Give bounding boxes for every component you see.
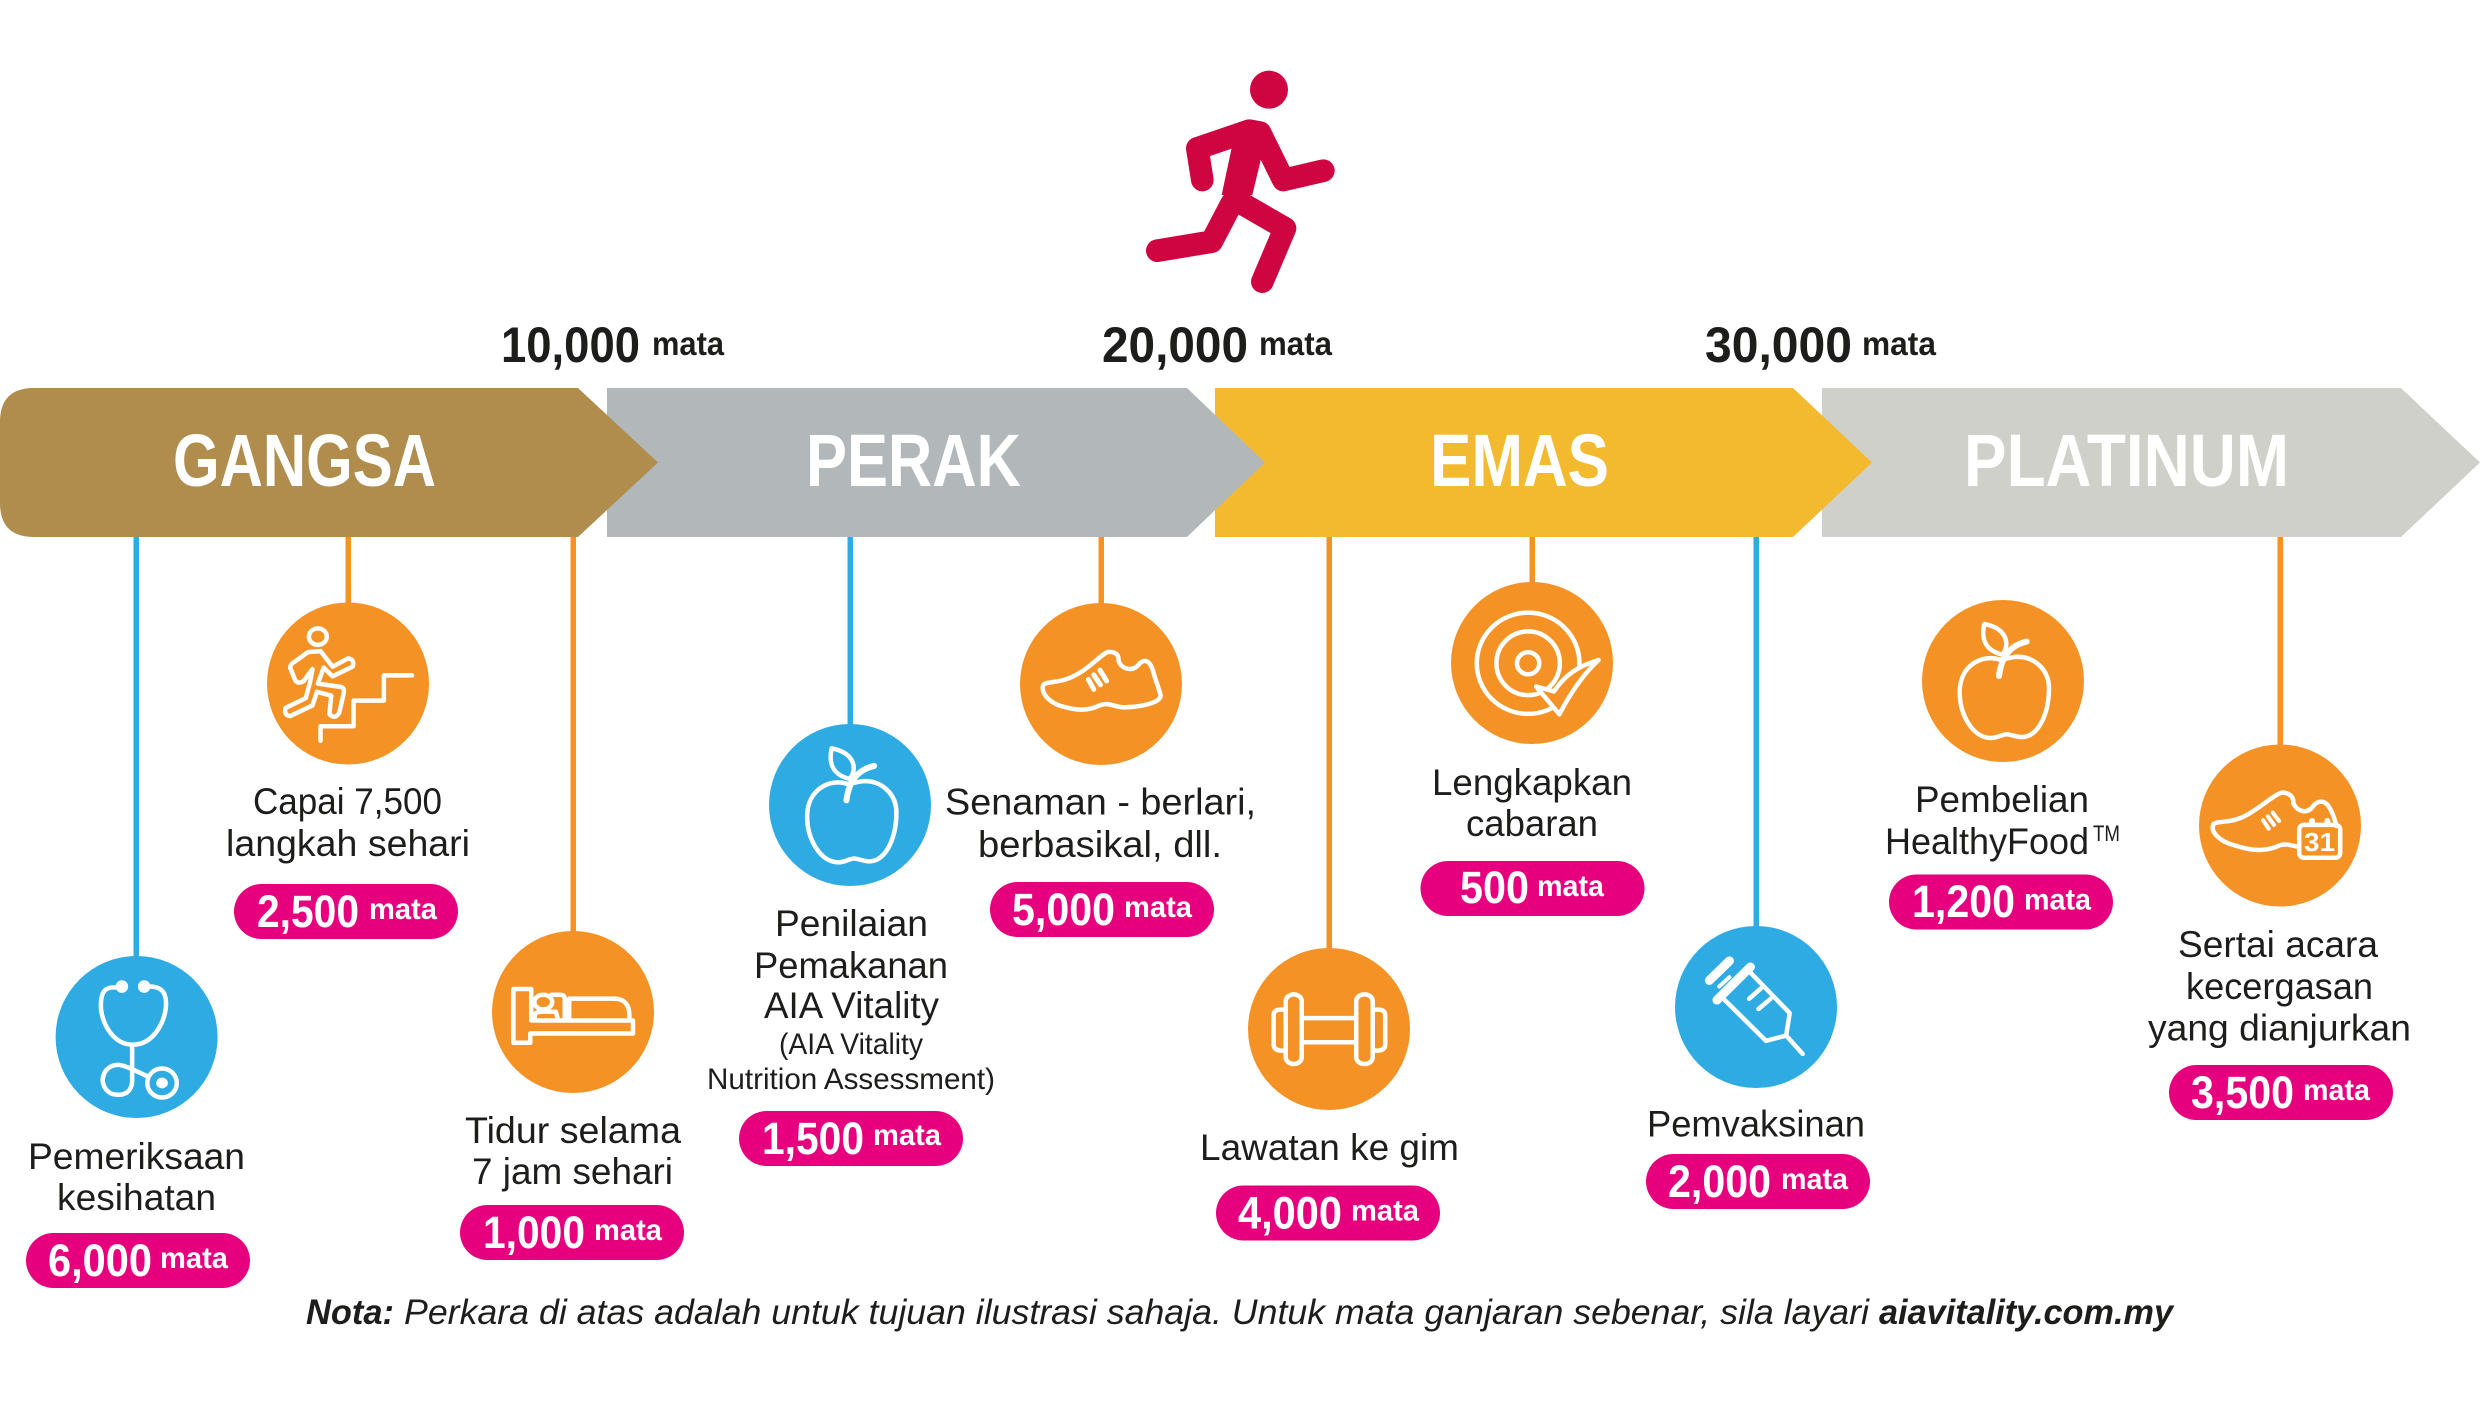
pill: 4,000 mata: [1216, 1186, 1440, 1240]
pill: 2,500 mata: [234, 884, 458, 939]
threshold: 30,000 mata: mata: [1862, 325, 1937, 362]
activity: Senaman - berlari, berbasikal, dll.: [945, 537, 1256, 937]
label: Lengkapkan cabaran: [1432, 761, 1632, 844]
pill: 1,000 mata: mata: [594, 1214, 662, 1247]
pill: 5,000 mata: [990, 882, 1214, 937]
pill: 2,500 mata: 2,500: [257, 886, 359, 937]
icon: dumbbell: [1274, 994, 1385, 1064]
label: Sertai acara kecergasan yang dianjurkan: Sertai acara: [2178, 923, 2378, 965]
label: Lengkapkan cabaran: Lengkapkan: [1432, 761, 1632, 803]
label: Penilaian Pemakanan AIA Vitality: Pemakanan: [754, 944, 948, 986]
label: Pembelian HealthyFood TM: HealthyFood: [1885, 820, 2089, 862]
label: Lawatan ke gim: Lawatan ke gim: [1200, 1126, 1459, 1168]
label: Capai 7,500 langkah sehari: Capai 7,500: [253, 780, 442, 822]
label: Pembelian HealthyFood TM: TM: [2093, 821, 2120, 846]
pill: 3,500 mata: 3,500: [2191, 1067, 2294, 1118]
activity: Sertai acara kecergasan yang dianjurkan: [2148, 537, 2411, 1120]
pill: 500 mata: mata: [1537, 870, 1604, 903]
tier arrow: EMAS: [1215, 388, 1872, 537]
activity: Lawatan ke gim: [1200, 537, 1459, 1240]
tier arrow: PERAK: [607, 388, 1265, 537]
pill: 5,000 mata: mata: [1124, 891, 1192, 924]
label: Sertai acara kecergasan yang dianjurkan: kecergasan: [2186, 965, 2373, 1007]
icon: person in bed: [513, 989, 633, 1043]
threshold: 10,000 mata: [501, 317, 725, 373]
activity: Lengkapkan cabaran: [1420, 537, 1644, 916]
pill: 1,000 mata: 1,000: [483, 1207, 585, 1258]
footnote: aiavitality.com.my: [1879, 1293, 2175, 1332]
calendar number: 31: [2304, 827, 2335, 857]
icon: apple: [807, 748, 896, 862]
pill: 6,000 mata: mata: [160, 1242, 228, 1275]
footnote: Perkara di atas adalah untuk tujuan ilustrasi sahaja. Untuk mata ganjaran sebenar, sila layari: [404, 1293, 1870, 1332]
label: Penilaian Pemakanan AIA Vitality: [707, 902, 995, 1096]
label: Senaman - berlari, berbasikal, dll.: berbasikal, dll.: [978, 823, 1222, 865]
threshold: 20,000 mata: [1102, 317, 1333, 373]
tier arrow: PERAK: PERAK: [806, 419, 1021, 502]
threshold: 20,000 mata: mata: [1259, 325, 1333, 362]
tier arrow: GANGSA: GANGSA: [173, 419, 436, 502]
icon: person climbing stairs: [285, 628, 412, 741]
pill: 4,000 mata: 4,000: [1238, 1188, 1342, 1238]
pill: 4,000 mata: mata: [1351, 1194, 1419, 1228]
pill: 2,500 mata: mata: [369, 893, 437, 926]
threshold: 10,000 mata: mata: [652, 325, 725, 362]
threshold: 20,000 mata: 20,000: [1102, 317, 1248, 373]
icon: apple: [1960, 624, 2049, 738]
pill: 1,200 mata: mata: [2024, 884, 2091, 916]
icon: shoe with calendar: [2213, 793, 2340, 858]
label: Pemeriksaan kesihatan: kesihatan: [57, 1176, 216, 1218]
pill: 1,500 mata: mata: [873, 1119, 941, 1152]
pill: 1,500 mata: 1,500: [762, 1113, 864, 1164]
label: Pembelian HealthyFood TM: Pembelian: [1915, 778, 2089, 820]
activity: Capai 7,500 langkah sehari: [226, 537, 470, 939]
tier arrow: GANGSA: [0, 388, 658, 537]
label: Pemeriksaan kesihatan: Pemeriksaan: [28, 1135, 245, 1177]
activity: Pembelian HealthyFood: [1885, 600, 2120, 930]
activity: Tidur selama 7 jam sehari: [460, 537, 684, 1260]
label: Pemeriksaan kesihatan: [28, 1135, 245, 1218]
label: Capai 7,500 langkah sehari: langkah sehari: [226, 822, 470, 864]
icon: stethoscope: [101, 981, 177, 1098]
label: Pembelian HealthyFood TM: [1885, 778, 2120, 862]
activity: Pemvaksinan: [1646, 537, 1870, 1209]
pill: 5,000 mata: 5,000: [1012, 884, 1115, 935]
tier arrow: EMAS: EMAS: [1430, 419, 1609, 502]
label: Tidur selama 7 jam sehari: Tidur selama: [465, 1109, 681, 1151]
tier arrow: PLATINUM: [1822, 388, 2480, 537]
pill: 2,000 mata: mata: [1781, 1163, 1848, 1196]
pill: 2,000 mata: [1646, 1154, 1870, 1209]
pill: 500 mata: [1420, 861, 1644, 916]
pill: 2,000 mata: 2,000: [1668, 1156, 1771, 1207]
icon: running shoe: [1043, 652, 1161, 710]
label: Senaman - berlari, berbasikal, dll.: Senaman - berlari,: [945, 780, 1256, 822]
pill: 6,000 mata: 6,000: [48, 1235, 152, 1286]
pill: 3,500 mata: mata: [2303, 1074, 2370, 1107]
tier arrow: PLATINUM: PLATINUM: [1964, 419, 2289, 502]
pill: 500 mata: 500: [1460, 862, 1529, 913]
label: Sertai acara kecergasan yang dianjurkan: [2148, 923, 2411, 1048]
label: Lengkapkan cabaran: cabaran: [1466, 802, 1598, 844]
label: Penilaian Pemakanan AIA Vitality: Penilaian: [775, 902, 928, 944]
label: Senaman - berlari, berbasikal, dll.: [945, 780, 1256, 865]
label: Penilaian Pemakanan AIA Vitality: AIA Vitality: [764, 984, 939, 1026]
icon: syringe: [1709, 961, 1803, 1054]
activity: Pemeriksaan kesihatan: [26, 537, 250, 1288]
label: Tidur selama 7 jam sehari: [465, 1109, 681, 1192]
pill: 1,200 mata: [1889, 874, 2113, 930]
label: Penilaian Pemakanan AIA Vitality: Nutrition Assessment): [707, 1063, 995, 1096]
label: Pemvaksinan: Pemvaksinan: [1647, 1102, 1865, 1144]
pill: 1,200 mata: 1,200: [1912, 876, 2015, 927]
footnote: Nota:: [306, 1293, 394, 1332]
threshold: 10,000 mata: 10,000: [501, 317, 640, 373]
threshold: 30,000 mata: 30,000: [1705, 317, 1852, 373]
icon: target with check: [1477, 613, 1599, 714]
pill: 1,500 mata: [739, 1111, 963, 1166]
threshold: 30,000 mata: [1705, 317, 1937, 373]
connector lines and activities: [26, 537, 2411, 1288]
pill: 3,500 mata: [2169, 1065, 2393, 1120]
label: Tidur selama 7 jam sehari: 7 jam sehari: [472, 1150, 673, 1192]
label: Penilaian Pemakanan AIA Vitality: (AIA Vitality: [779, 1028, 923, 1061]
label: Capai 7,500 langkah sehari: [226, 780, 470, 864]
label: Sertai acara kecergasan yang dianjurkan: yang dianjurkan: [2148, 1006, 2411, 1048]
icon: red running figure: [1157, 71, 1323, 282]
pill: 6,000 mata: [26, 1233, 250, 1288]
pill: 1,000 mata: [460, 1205, 684, 1260]
activity: Penilaian Pemakanan AIA Vitality: [707, 537, 995, 1166]
